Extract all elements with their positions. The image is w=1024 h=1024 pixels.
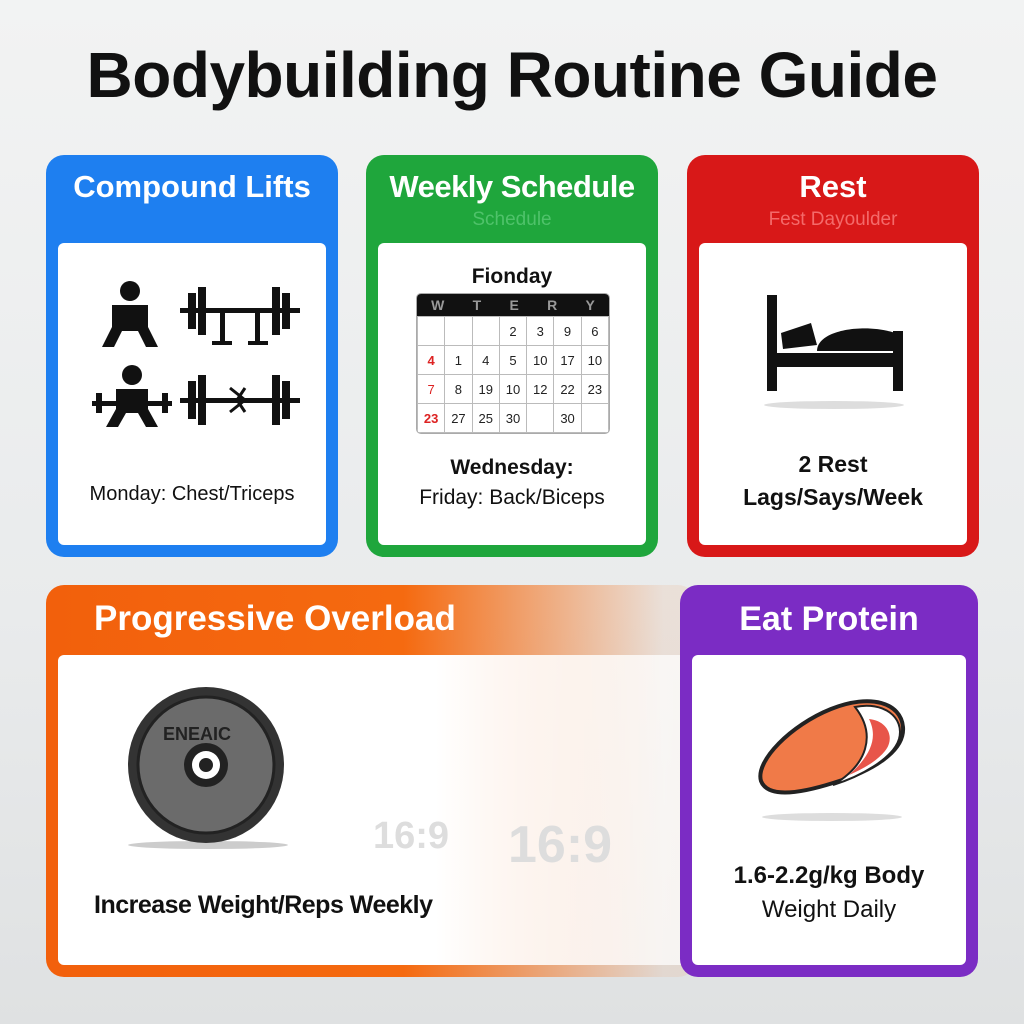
- calendar: 12: [533, 382, 548, 396]
- calendar: 10: [506, 382, 520, 396]
- panel: progressive overload: 16:9: [508, 816, 612, 874]
- text: schedule days: Wednesday:: [450, 456, 574, 479]
- calendar: 23: [424, 410, 438, 426]
- calendar: Y: [586, 297, 595, 313]
- calendar: 8: [455, 382, 462, 396]
- calendar: 4: [428, 352, 435, 368]
- panel: eat protein: [680, 585, 978, 977]
- heading: Rest: [799, 169, 867, 204]
- calendar: 17: [560, 352, 575, 368]
- calendar: 9: [564, 324, 571, 338]
- text: rest days: [743, 451, 923, 510]
- icons: exercises: [92, 281, 300, 427]
- calendar: 30: [506, 410, 520, 426]
- panel: rest: [687, 155, 979, 557]
- icon: bed: [764, 295, 904, 409]
- calendar: 6: [591, 324, 598, 338]
- heading: Progressive Overload: [94, 599, 456, 638]
- panel: weekly schedule: Schedule: [472, 209, 552, 230]
- calendar: 5: [509, 352, 517, 368]
- calendar: 23: [588, 382, 602, 396]
- panel: progressive overload: [46, 585, 696, 977]
- text: schedule days: Friday: Back/Biceps: [419, 486, 605, 509]
- heading: Weekly Schedule: [389, 169, 635, 204]
- text: protein amount: 1.6-2.2g/kg Body: [734, 862, 924, 889]
- text: protein amount: Weight Daily: [762, 896, 896, 923]
- title: Bodybuilding Routine Guide: [87, 39, 937, 111]
- calendar: 25: [478, 410, 493, 426]
- icon: meat: [758, 699, 906, 821]
- calendar: 2: [509, 324, 517, 338]
- calendar: [416, 293, 610, 434]
- text: schedule days: [419, 456, 605, 509]
- heading: Eat Protein: [739, 600, 919, 638]
- calendar: R: [547, 297, 557, 313]
- text: fionday: Fionday: [472, 265, 552, 288]
- calendar: W: [431, 297, 444, 313]
- calendar: 1: [455, 352, 462, 368]
- calendar: E: [509, 297, 519, 313]
- calendar: 22: [560, 382, 575, 396]
- text: monday: Monday: Chest/Triceps: [90, 483, 294, 505]
- calendar: 30: [560, 410, 575, 426]
- text: increase weight: Increase Weight/Reps Weekly: [94, 891, 433, 919]
- text: 16:9: 16:9: [373, 815, 449, 857]
- text: rest days: Lags/Says/Week: [743, 484, 923, 510]
- calendar: 7: [428, 382, 435, 396]
- icon: weight plate: [128, 687, 288, 849]
- calendar: 3: [537, 324, 544, 338]
- text: protein amount: [734, 862, 924, 923]
- heading: Compound Lifts: [73, 169, 311, 204]
- calendar: 10: [533, 352, 548, 368]
- calendar: 10: [588, 352, 602, 368]
- panel: weekly schedule: [366, 155, 658, 557]
- icon: weight plate: ENEAIC: [163, 724, 231, 744]
- calendar: 19: [478, 382, 493, 396]
- calendar: 4: [482, 352, 489, 368]
- panel: compound lifts: [46, 155, 338, 557]
- calendar: 27: [451, 410, 466, 426]
- calendar: T: [473, 297, 481, 313]
- panel: rest: Fest Dayoulder: [769, 209, 897, 230]
- text: rest days: 2 Rest: [798, 451, 868, 477]
